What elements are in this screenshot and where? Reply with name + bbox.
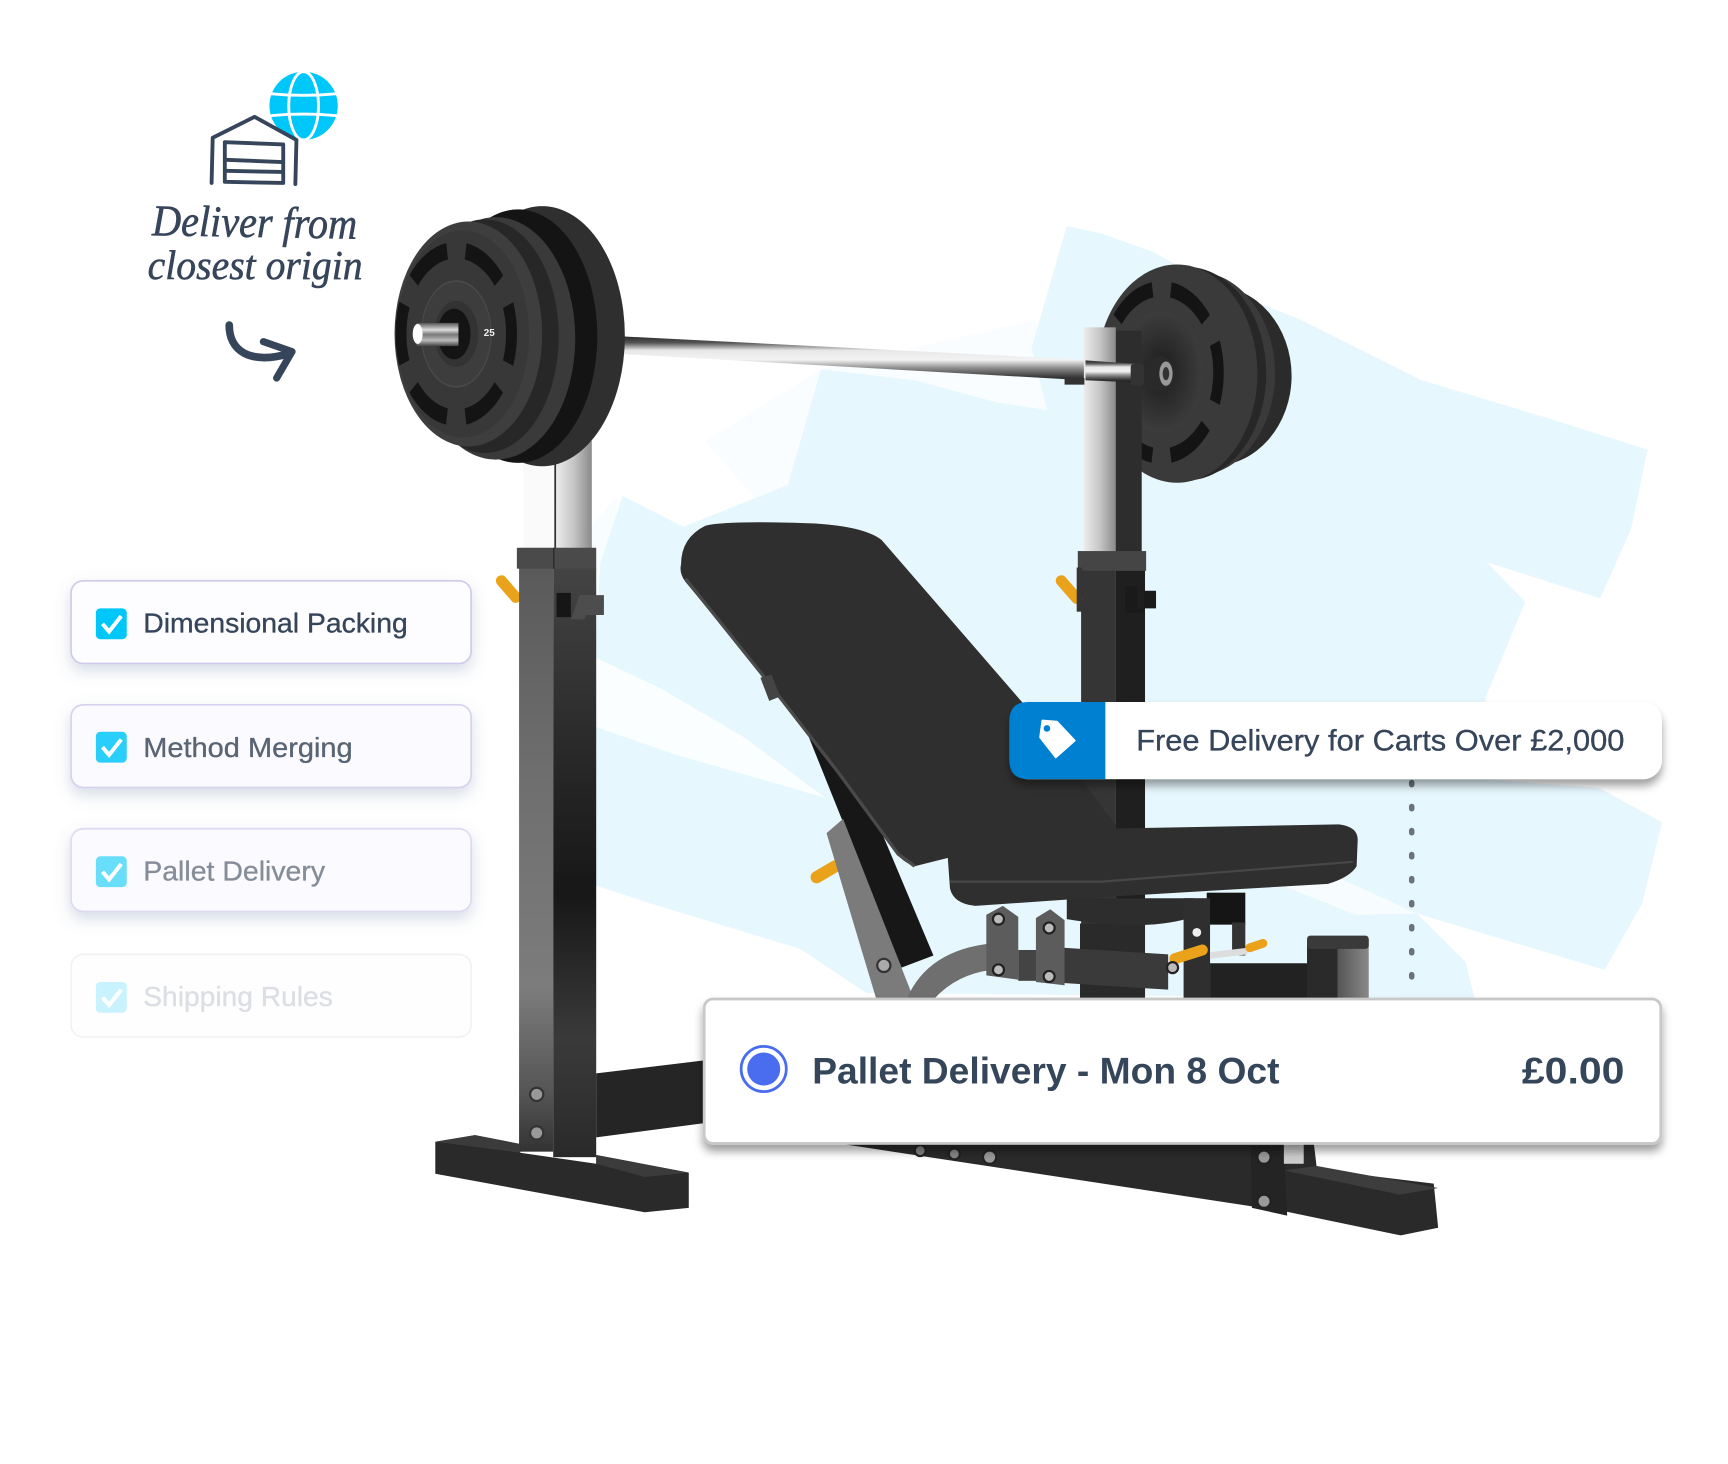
- background watercolor wash: [529, 226, 1662, 998]
- card: Shipping Rules: Shipping Rules: [143, 981, 333, 1012]
- right upright: [1061, 327, 1156, 1003]
- under seat frame: [986, 893, 1369, 1001]
- bottom rail: [828, 1142, 1438, 1235]
- card: Dimensional Packing: [71, 581, 471, 663]
- left upright post: [501, 548, 604, 1157]
- icon: warehouse with globe: [212, 72, 338, 184]
- handwritten caption: Deliver from: [151, 196, 358, 249]
- card: Shipping Rules: [71, 954, 471, 1037]
- callout: free delivery: Free Delivery for Carts Over £2,000: [1136, 725, 1624, 758]
- right weight plates: [1097, 265, 1292, 483]
- icon: price tag: [1040, 721, 1074, 757]
- left faint upright: [523, 446, 554, 548]
- icon: warehouse: [212, 117, 296, 184]
- weight bench illustration: [395, 206, 1438, 1235]
- icon: radio button: [741, 1046, 786, 1092]
- card: Pallet Delivery: Pallet Delivery: [143, 856, 325, 887]
- card: Dimensional Packing: Dimensional Packing: [143, 608, 408, 639]
- cross bar: [596, 1060, 705, 1137]
- seat pad: [948, 824, 1358, 906]
- panel: feature checklist: [71, 581, 471, 1037]
- left upright silver: [555, 441, 592, 551]
- bar: [617, 336, 1142, 384]
- panel: delivery option: Pallet Delivery - Mon 8 Oct: [812, 1049, 1280, 1091]
- handwritten caption: closest origin: [148, 243, 363, 288]
- left weight plates: [395, 206, 625, 466]
- callout: free delivery: [1009, 702, 1662, 779]
- arrow: curved: [229, 325, 292, 378]
- dotted connector: [1409, 782, 1414, 998]
- bar over right upright: [1086, 360, 1135, 382]
- bench rear support: [807, 727, 992, 998]
- handwritten caption: [148, 196, 363, 288]
- card: Method Merging: Method Merging: [143, 732, 353, 763]
- left weight plates: 25: [484, 328, 495, 339]
- panel: delivery option: [704, 999, 1661, 1143]
- panel: delivery option: £0.00: [1522, 1049, 1624, 1091]
- back pad: [681, 522, 1115, 871]
- left foot: [435, 1135, 689, 1212]
- card: Pallet Delivery: [71, 829, 471, 911]
- card: Method Merging: [71, 705, 471, 787]
- icon: globe: [269, 72, 338, 140]
